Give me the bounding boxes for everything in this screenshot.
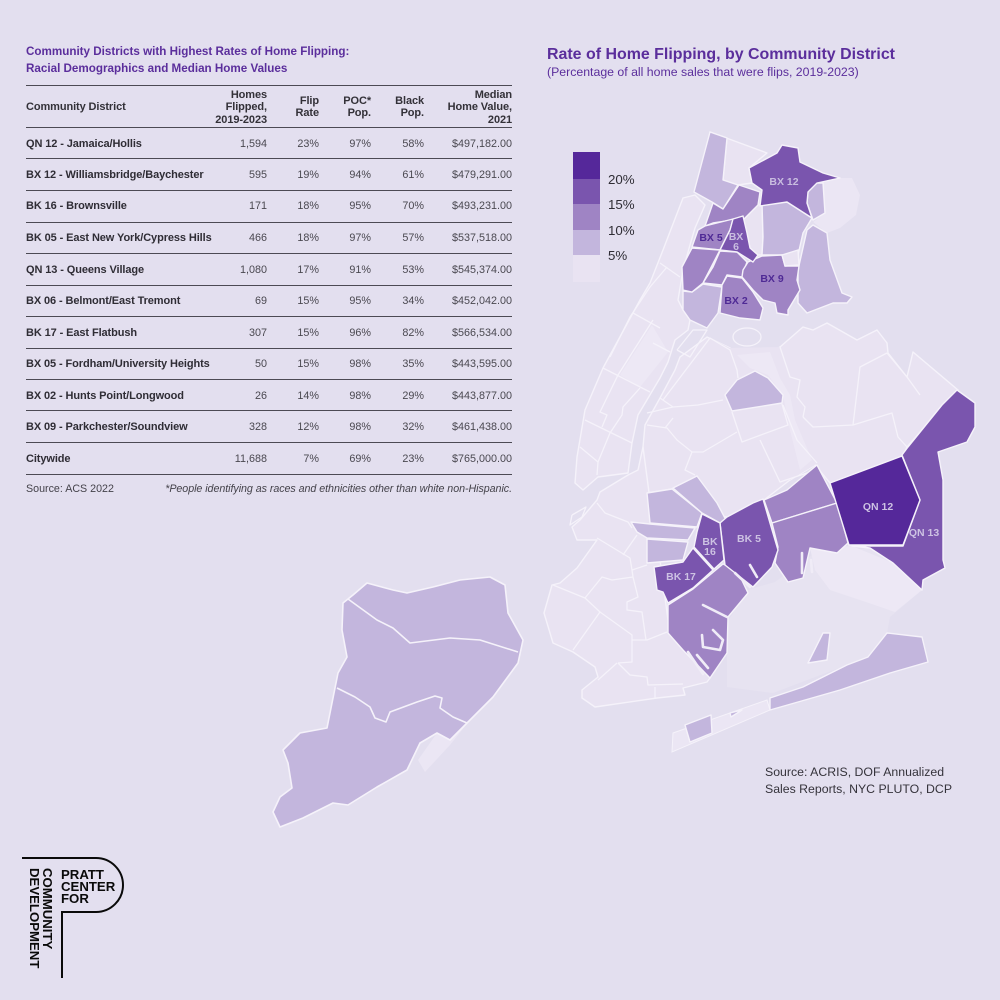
row: BX 02: $443,877.00 <box>452 390 512 402</box>
legend: 15% <box>608 197 635 212</box>
row: BK 17: 82% <box>402 327 424 339</box>
logo: Pratt Center for Community Development: DEVELOPMENT <box>27 868 42 968</box>
row: BX 02: BX 02 - Hunts Point/Longwood <box>26 390 184 402</box>
row: BX 02: 26 <box>255 390 267 402</box>
row: BX 02 <box>26 390 512 402</box>
row: BX 06: 15% <box>297 295 319 307</box>
row: BX 05: $443,595.00 <box>452 358 512 370</box>
panel: districts 15 to 20 percent <box>654 145 975 603</box>
map labels: Bronx: 6 <box>733 241 739 253</box>
panel: Jamaica Bay <box>727 546 922 693</box>
row: BK 16 <box>26 200 512 212</box>
legend <box>573 152 635 282</box>
row: BX 09: BX 09 - Parkchester/Soundview <box>26 421 188 433</box>
row: Citywide: 7% <box>303 453 319 465</box>
row: BK 05: $537,518.00 <box>452 232 512 244</box>
row: BK 17: 15% <box>297 327 319 339</box>
map labels: Queens and Brooklyn: QN 13 <box>909 527 939 539</box>
table header: Flip <box>300 95 319 107</box>
row: Citywide: $765,000.00 <box>452 453 512 465</box>
map labels: Bronx <box>699 176 799 307</box>
table title: Racial Demographics and Median Home Values <box>26 62 287 75</box>
table title <box>26 45 349 75</box>
row: BX 02: 14% <box>297 390 319 402</box>
row: BK 05: 18% <box>297 232 319 244</box>
row: BX 05: 35% <box>402 358 424 370</box>
row: BX 05: 15% <box>297 358 319 370</box>
table header: Flipped, <box>226 101 267 113</box>
row: BX 12: 19% <box>297 169 319 181</box>
map labels: Queens and Brooklyn: BK <box>702 536 718 548</box>
table header: 2019-2023 <box>215 114 267 126</box>
row: BX 09: 98% <box>349 421 371 433</box>
legend: 5% <box>608 248 627 263</box>
panel: inlet cut-outs <box>688 553 812 674</box>
panel: western Rockaway <box>672 700 770 752</box>
logo: Pratt Center for Community Development: CENTER <box>61 879 116 894</box>
row: QN 13: 91% <box>349 264 371 276</box>
row: Citywide <box>26 453 512 465</box>
legend: 20% <box>608 172 635 187</box>
row: Citywide: 69% <box>349 453 371 465</box>
row: QN 13 <box>26 264 512 276</box>
row: BK 05: 57% <box>402 232 424 244</box>
row: QN 12: 58% <box>402 138 424 150</box>
map source note <box>765 765 952 796</box>
table header <box>26 85 512 126</box>
row: QN 12: 23% <box>297 138 319 150</box>
row: BX 09: 32% <box>402 421 424 433</box>
row: BK 16: 171 <box>249 200 267 212</box>
row: BK 05: 466 <box>249 232 267 244</box>
table header: POC* <box>343 95 371 107</box>
row: BK 05: 97% <box>349 232 371 244</box>
map heading: Rate of Home Flipping, by Community District <box>547 46 896 63</box>
row: BK 16: 18% <box>297 200 319 212</box>
logo: Pratt Center for Community Development: COMMUNITY <box>40 868 55 950</box>
logo: Pratt Center for Community Development <box>22 858 123 978</box>
logo: Pratt Center for Community Development: PRATT <box>61 867 104 882</box>
row: BX 06 <box>26 295 512 307</box>
row: Citywide: 11,688 <box>235 453 267 465</box>
row: QN 13: 1,080 <box>240 264 267 276</box>
row: BX 06: 69 <box>255 295 267 307</box>
legend: 10% <box>608 223 635 238</box>
row: BK 05 <box>26 232 512 244</box>
table panel: community districts with highest flipping rates <box>26 45 512 495</box>
table header: Pop. <box>401 107 424 119</box>
table header: Homes <box>231 89 267 101</box>
row: BX 06: 95% <box>349 295 371 307</box>
row: BX 05: 98% <box>349 358 371 370</box>
map heading <box>547 46 896 79</box>
map heading: (Percentage of all home sales that were flips, 2019-2023) <box>547 65 859 79</box>
map labels: Bronx: BX 12 <box>769 176 799 188</box>
panel: Pelham Bay lighter parkland <box>813 178 860 233</box>
map labels: Queens and Brooklyn: 16 <box>704 546 716 558</box>
table header: Rate <box>296 107 319 119</box>
map labels: Queens and Brooklyn <box>666 501 939 583</box>
map labels: Bronx: BX 9 <box>760 273 784 285</box>
row: BK 16: $493,231.00 <box>452 200 512 212</box>
row: QN 12: $497,182.00 <box>452 138 512 150</box>
row: BX 05 <box>26 358 512 370</box>
table header: Home Value, <box>448 101 512 113</box>
row: QN 12 <box>26 138 512 150</box>
row: BX 06: BX 06 - Belmont/East Tremont <box>26 295 180 307</box>
panel: district boundary lines <box>553 263 920 698</box>
row: QN 12: 1,594 <box>240 138 267 150</box>
row: BX 09: 328 <box>249 421 267 433</box>
row: BK 05: BK 05 - East New York/Cypress Hills <box>26 232 212 244</box>
row: BK 17: BK 17 - East Flatbush <box>26 327 137 339</box>
row: BX 12: BX 12 - Williamsbridge/Baychester <box>26 169 204 181</box>
row: QN 13: 17% <box>297 264 319 276</box>
table source and footnote: Source: ACS 2022 <box>26 483 114 495</box>
row: BK 17 <box>26 327 512 339</box>
panel: districts 5 to 10 percent <box>631 132 928 742</box>
map labels: Bronx: BX <box>729 231 743 243</box>
row: BX 02: 29% <box>402 390 424 402</box>
panel: districts 10 to 15 percent <box>668 185 848 678</box>
row: QN 12: 97% <box>349 138 371 150</box>
table title: Community Districts with Highest Rates of Home Flipping: <box>26 45 349 58</box>
row: BX 05: BX 05 - Fordham/University Heights <box>26 358 210 370</box>
table header: Community District <box>26 101 126 113</box>
row: BX 06: $452,042.00 <box>452 295 512 307</box>
row: QN 13: 53% <box>402 264 424 276</box>
table header: Black <box>395 95 424 107</box>
panel: Flushing Meadows lighter parkland <box>620 325 812 470</box>
row: QN 13: $545,374.00 <box>452 264 512 276</box>
map source note: Source: ACRIS, DOF Annualized <box>765 765 944 779</box>
row: BK 16: BK 16 - Brownsville <box>26 200 127 212</box>
panel: land base <box>544 132 958 707</box>
row: BK 16: 70% <box>402 200 424 212</box>
map labels: Queens and Brooklyn: QN 12 <box>863 501 893 513</box>
table source and footnote: *People identifying as races and ethnicities other than white non-Hispanic. <box>165 483 512 495</box>
panel: district over 20 percent <box>830 456 920 545</box>
row: BX 02: 98% <box>349 390 371 402</box>
row: BX 12: $479,291.00 <box>452 169 512 181</box>
row: BX 09 <box>26 421 512 433</box>
map labels: Queens and Brooklyn: BK 17 <box>666 571 696 583</box>
row: BX 09: $461,438.00 <box>452 421 512 433</box>
map source note: Sales Reports, NYC PLUTO, DCP <box>765 782 952 796</box>
row: BX 12: 94% <box>349 169 371 181</box>
table header: Pop. <box>348 107 371 119</box>
panel: small lightest Bronx square <box>782 250 799 266</box>
map labels: Bronx: BX 5 <box>699 232 723 244</box>
row: BK 16: 95% <box>349 200 371 212</box>
table header: Median <box>475 89 512 101</box>
row: BK 17: 96% <box>349 327 371 339</box>
map labels: Bronx: BX 2 <box>724 295 748 307</box>
row: QN 13: QN 13 - Queens Village <box>26 264 144 276</box>
row: BK 17: 307 <box>249 327 267 339</box>
row: Citywide: 23% <box>402 453 424 465</box>
row: BK 17: $566,534.00 <box>452 327 512 339</box>
row: BX 09: 12% <box>297 421 319 433</box>
logo: Pratt Center for Community Development: FOR <box>61 891 89 906</box>
row: BX 12: 61% <box>402 169 424 181</box>
row: BX 12 <box>26 169 512 181</box>
row: QN 12: QN 12 - Jamaica/Hollis <box>26 138 142 150</box>
row: Citywide: Citywide <box>26 453 70 465</box>
table header: 2021 <box>488 114 512 126</box>
row: BX 05: 50 <box>255 358 267 370</box>
map labels: Queens and Brooklyn: BK 5 <box>737 533 761 545</box>
row: BX 12: 595 <box>249 169 267 181</box>
row: BX 06: 34% <box>402 295 424 307</box>
panel: Staten Island <box>273 577 523 827</box>
